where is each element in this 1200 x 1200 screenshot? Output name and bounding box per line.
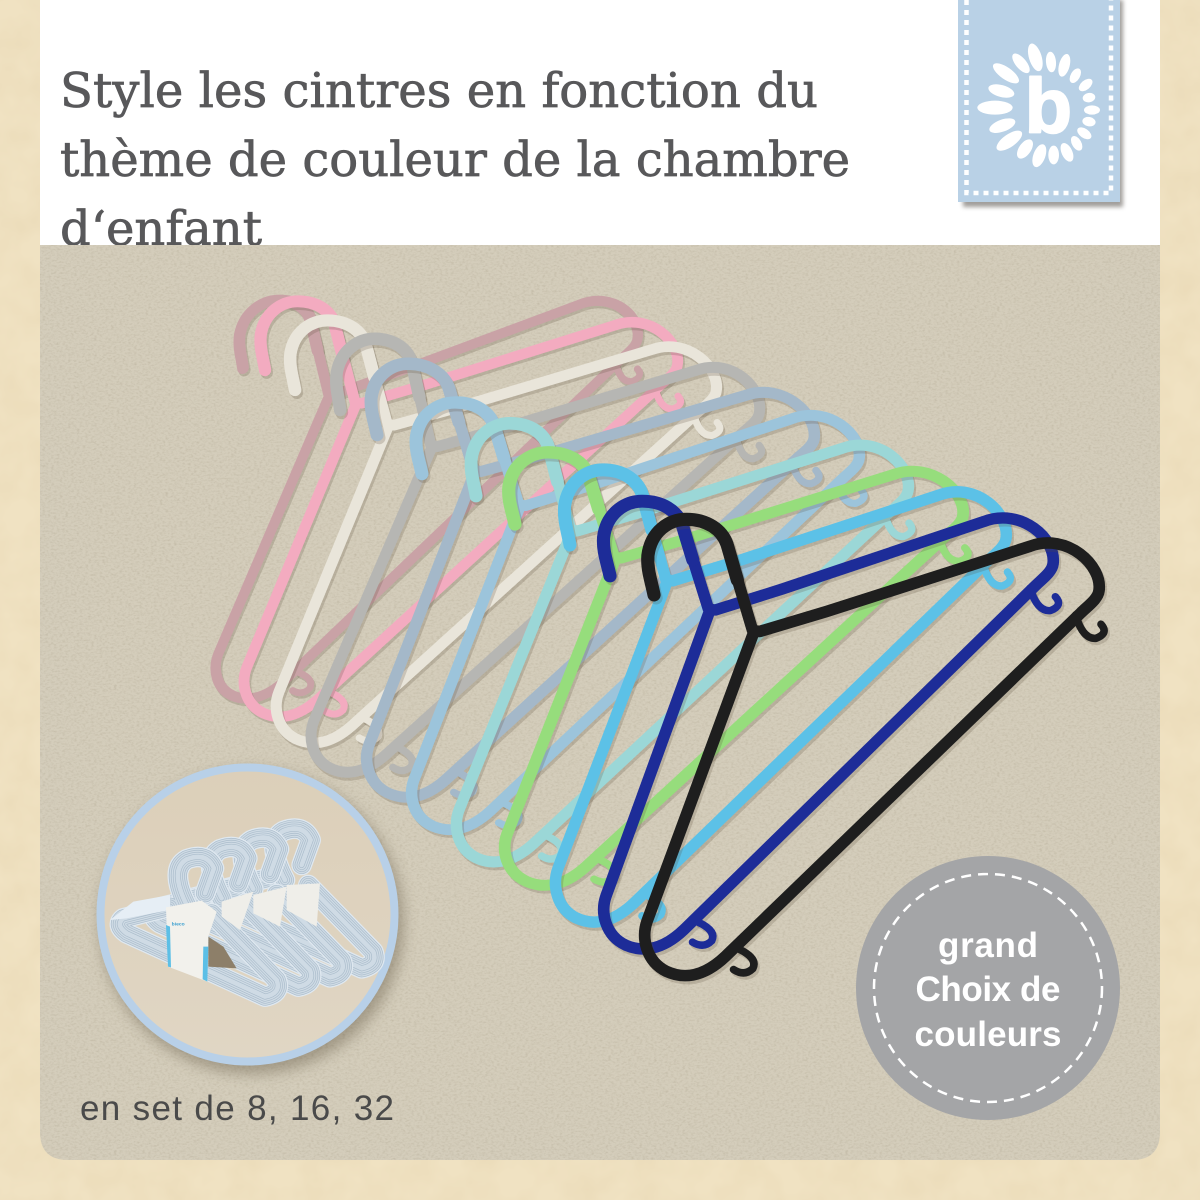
hanger: light blue xyxy=(412,393,866,833)
icon: flower logo: b xyxy=(1025,64,1072,150)
product label card: bieco xyxy=(172,922,185,928)
packaged hanger bundles xyxy=(110,829,374,997)
hanger: green xyxy=(505,449,970,888)
title xyxy=(60,63,850,257)
hangers xyxy=(213,278,1106,980)
icon: flower logo xyxy=(977,42,1100,169)
header panel xyxy=(40,0,1160,260)
fabric background xyxy=(40,245,1160,1160)
hanger: black xyxy=(644,519,1106,980)
badge: colour choice xyxy=(856,856,1120,1120)
hanger: white xyxy=(275,320,725,752)
inset circle: packaged set xyxy=(100,768,404,1074)
hanger: grey xyxy=(309,338,770,783)
hanger: navy xyxy=(600,495,1064,953)
hanger: sky blue xyxy=(555,469,1014,925)
badge: colour choice: grand xyxy=(938,926,1038,965)
badge: colour choice: Choix de xyxy=(916,970,1060,1009)
product label card xyxy=(166,901,217,982)
hanger: teal xyxy=(455,423,917,865)
badge: colour choice: couleurs xyxy=(914,1015,1062,1054)
hanger: pink xyxy=(243,301,686,720)
title: thème de couleur de la chambre xyxy=(60,132,850,188)
title: Style les cintres en fonction du xyxy=(60,63,818,119)
logo tag xyxy=(958,0,1123,207)
hanger: grey blue xyxy=(367,363,821,808)
title: d‘enfant xyxy=(60,201,262,257)
hanger: mauve xyxy=(213,278,648,703)
caption: set sizes: en set de 8, 16, 32 xyxy=(80,1089,394,1128)
panel: photo of hangers xyxy=(40,245,1160,1160)
